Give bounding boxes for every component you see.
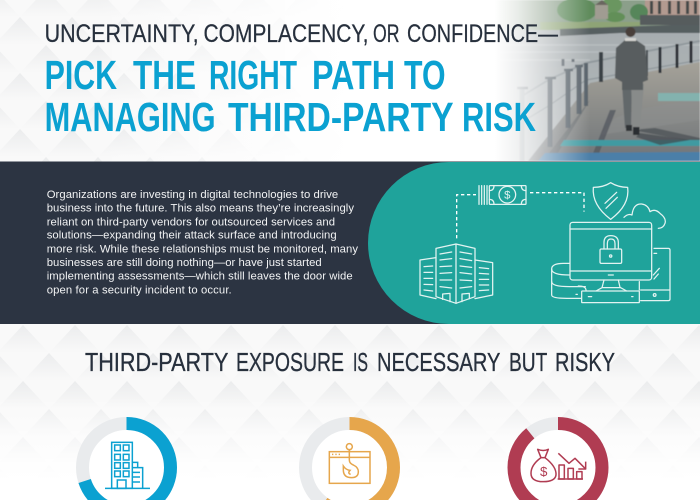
main title: pick the right path to managing third-party risk: PICK xyxy=(45,52,117,98)
main title: pick the right path to managing third-party risk xyxy=(45,52,536,140)
teal and blue pavement stripes xyxy=(560,140,700,146)
header eyebrow: uncertainty, complacency, or confidence: UNCERTAINTY, xyxy=(45,20,199,48)
header eyebrow: uncertainty, complacency, or confidence: OR xyxy=(373,20,400,48)
intro paragraph: implementing assessments—which still leaves the door wide xyxy=(47,271,353,283)
intro paragraph: open for a security incident to occur. xyxy=(47,284,232,296)
icon: tablet xyxy=(639,248,670,301)
icon: banknote: $ xyxy=(504,190,511,202)
section heading: third-party exposure is necessary but risky: BUT xyxy=(509,347,547,377)
icon: office building xyxy=(105,442,150,488)
intro paragraph: businesses are still doing nothing—or have just started xyxy=(47,257,322,269)
section heading: third-party exposure is necessary but risky: RISKY xyxy=(555,347,615,377)
header photo: man walking along waterfront xyxy=(495,0,700,161)
icon: shield xyxy=(593,183,628,219)
icon: browser window with fish hook xyxy=(329,444,370,483)
main title: pick the right path to managing third-party risk: RISK xyxy=(462,94,536,140)
donut stat: red, money loss icon xyxy=(514,424,602,500)
teal pill panel xyxy=(368,162,700,324)
intro paragraph: reliant on third-party vendors for outsourced services and xyxy=(47,216,335,228)
header eyebrow: uncertainty, complacency, or confidence: COMPLACENCY, xyxy=(204,20,368,48)
icon: monitor with padlock xyxy=(570,222,652,291)
intro paragraph: solutions—expanding their attack surface and introducing xyxy=(47,230,337,242)
icon: banknote xyxy=(479,186,526,204)
main title: pick the right path to managing third-party risk: MANAGING xyxy=(45,94,216,140)
walkway xyxy=(528,62,700,161)
dashed connectors xyxy=(457,193,584,238)
header background pattern xyxy=(0,0,700,162)
icon: keyboard bar xyxy=(582,291,639,303)
section heading: third-party exposure is necessary but risky: EXPOSURE xyxy=(236,347,344,377)
intro paragraph: more risk. While these relationships must be monitored, many xyxy=(47,243,358,255)
main title: pick the right path to managing third-party risk: THIRD-PARTY xyxy=(228,94,453,140)
main title: pick the right path to managing third-party risk: RIGHT xyxy=(209,52,297,98)
intro paragraph: Organizations are investing in digital technologies to drive xyxy=(47,189,338,201)
section heading: third-party exposure is necessary but risky: NECESSARY xyxy=(377,347,500,377)
icon: cloud xyxy=(624,204,665,228)
intro paragraph xyxy=(47,189,358,296)
donut stat: orange, phishing hook icon xyxy=(306,424,394,500)
railings xyxy=(517,41,700,161)
illustration: buildings, money, shield, cloud and secured devices xyxy=(420,183,670,303)
icon: office buildings xyxy=(420,244,493,303)
header eyebrow: uncertainty, complacency, or confidence: CONFIDENCE— xyxy=(407,20,558,48)
section heading: third-party exposure is necessary but risky: THIRD-PARTY xyxy=(85,347,228,377)
main title: pick the right path to managing third-party risk: THE xyxy=(133,52,196,98)
icon: database xyxy=(552,263,586,298)
icon: money bag and falling chart: $ xyxy=(540,464,548,479)
intro band: dark panel xyxy=(0,162,700,324)
main title: pick the right path to managing third-party risk: TO xyxy=(404,52,446,98)
intro paragraph: business into the future. This also means they’re increasingly xyxy=(47,203,354,215)
main title: pick the right path to managing third-party risk: PATH xyxy=(312,52,395,98)
lower section background pattern xyxy=(0,324,700,500)
donut stat: blue, 70 percent, building icon xyxy=(82,424,170,500)
section heading: third-party exposure is necessary but risky: IS xyxy=(353,347,368,377)
man xyxy=(615,27,690,145)
